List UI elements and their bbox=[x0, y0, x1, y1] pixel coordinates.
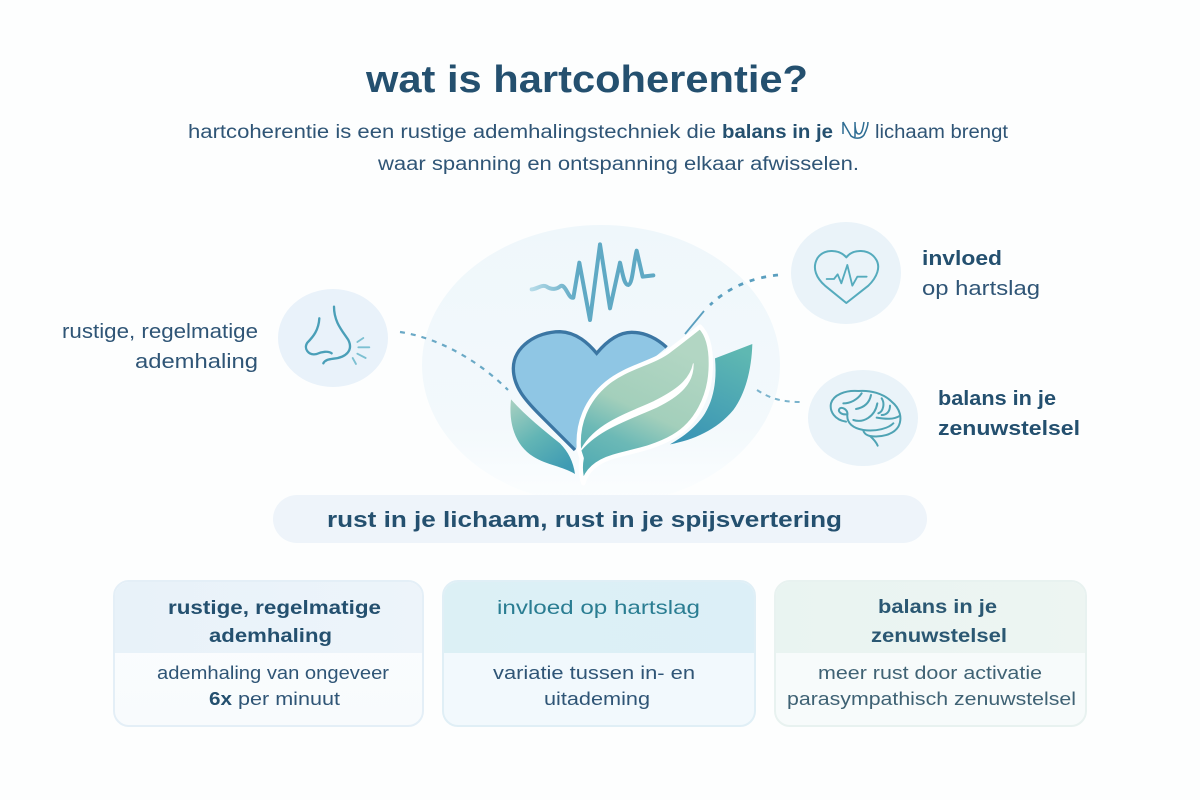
label: balans in je zenuwstelsel: balans in je bbox=[938, 388, 1056, 410]
intro text: balans in je bbox=[722, 122, 833, 143]
panel: card rustige, regelmatige ademhaling bbox=[114, 581, 423, 726]
label: rustige, regelmatige ademhaling: rustige, regelmatige bbox=[62, 321, 258, 343]
panel: card rustige, regelmatige ademhaling: ademhaling bbox=[209, 625, 332, 647]
label: balans in je zenuwstelsel: zenuwstelsel bbox=[938, 418, 1080, 440]
panel: card invloed op hartslag bbox=[443, 581, 755, 726]
intro text: lichaam brengt bbox=[875, 122, 1009, 143]
right back leaf bbox=[670, 344, 752, 444]
icon: heart with pulse bbox=[791, 222, 901, 324]
leaf vein bbox=[579, 363, 693, 453]
label: invloed op hartslag: op hartslag bbox=[922, 278, 1040, 300]
title: wat is hartcoherentie? bbox=[365, 59, 808, 101]
label: rustige, regelmatige ademhaling: ademhaling bbox=[135, 351, 258, 373]
intro text: hartcoherentie is een rustige ademhalingstechniek die bbox=[188, 122, 716, 143]
label: rustige, regelmatige ademhaling bbox=[62, 321, 258, 373]
dashed connector: breathing bbox=[400, 332, 508, 390]
main leaf bbox=[579, 327, 711, 483]
panel: card balans in je zenuwstelsel: meer rust door activatie bbox=[818, 663, 1042, 683]
panel: card balans in je zenuwstelsel: balans in je bbox=[878, 596, 997, 618]
panel: card invloed op hartslag: uitademing bbox=[544, 689, 650, 709]
panel: card rustige, regelmatige ademhaling: 6x bbox=[209, 689, 232, 709]
panel: card balans in je zenuwstelsel bbox=[775, 581, 1086, 726]
panel: card rustige, regelmatige ademhaling: ademhaling van ongeveer bbox=[157, 663, 389, 683]
panel: card rustige, regelmatige ademhaling: rustige, regelmatige bbox=[168, 597, 381, 619]
heart outline bbox=[513, 332, 667, 450]
label: invloed op hartslag: invloed bbox=[922, 248, 1002, 270]
label: balans in je zenuwstelsel bbox=[938, 388, 1080, 440]
panel: card balans in je zenuwstelsel: parasympathisch zenuwstelsel bbox=[787, 689, 1076, 709]
banner: rust in je lichaam, rust in je spijsvertering bbox=[327, 507, 842, 532]
intro text: waar spanning en ontspanning elkaar afwisselen. bbox=[377, 154, 859, 175]
banner bbox=[273, 495, 927, 543]
panel: card invloed op hartslag: variatie tussen in- en bbox=[493, 663, 695, 683]
panel: card rustige, regelmatige ademhaling: per minuut bbox=[238, 689, 340, 709]
panel: card invloed op hartslag: invloed op hartslag bbox=[497, 597, 700, 619]
central heart and leaves illustration bbox=[510, 244, 752, 483]
pulse line bbox=[532, 244, 653, 320]
dashed connector: nervous system bbox=[757, 390, 803, 402]
central background circle bbox=[422, 225, 780, 505]
left leaf bbox=[510, 399, 575, 474]
heart fill bbox=[513, 332, 667, 450]
icon: brain bbox=[808, 370, 918, 466]
panel: card balans in je zenuwstelsel: zenuwstelsel bbox=[871, 625, 1007, 647]
dashed connector: heart rate bbox=[685, 275, 778, 334]
icon: nose bbox=[278, 289, 388, 387]
intro text bbox=[188, 122, 1009, 175]
label: invloed op hartslag bbox=[922, 248, 1040, 300]
